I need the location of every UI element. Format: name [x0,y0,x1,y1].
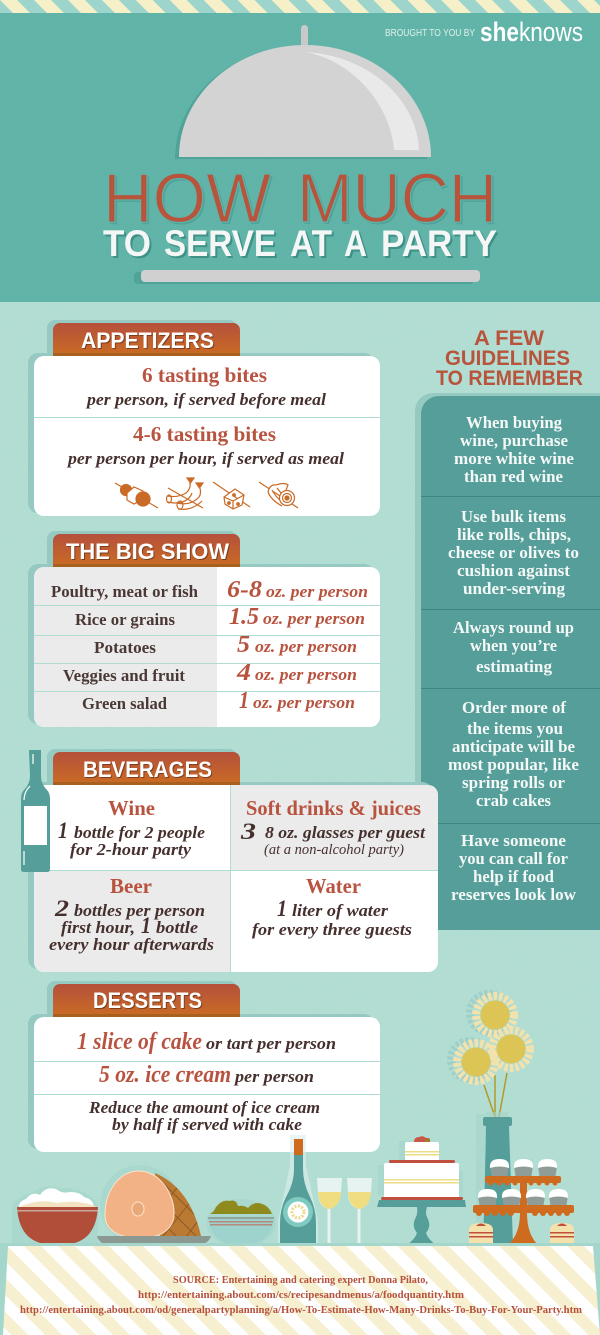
title line: to serve at a party: A [344,223,367,264]
row: green salad [82,688,355,714]
heading: the big show: THE BIG SHOW [66,539,229,564]
panel: beverages [21,749,438,972]
row: potatoes: Potatoes [94,638,157,657]
tip: popular items: most popular, like [448,755,579,774]
cell: water: 1 [277,896,287,921]
title line: how much: HOW [105,161,273,239]
heading: guidelines: A FEW [474,327,544,350]
cell: beer: 2 [54,896,69,921]
title line: how much: MUCH [299,161,499,239]
text: reduce ice cream [88,1098,320,1134]
cell: soft drinks: 8 oz. glasses per guest [265,823,425,842]
cupcakes: top tier [490,1159,557,1176]
text: ice cream [99,1062,314,1088]
tip: call for help: help if food [473,867,555,886]
cell: water: liter of water [292,901,389,920]
tip: call for help: reserves look low [451,885,577,904]
top stripe band [0,0,600,13]
text: cake [77,1029,336,1055]
icon: glazed ham on plate [97,1165,211,1246]
icon: champagne bottle [278,1135,318,1245]
heading: beverages: BEVERAGES [83,757,212,782]
tip: bulk items: under-serving [463,579,565,598]
row: rice: oz. per person [263,609,365,628]
tip: white wine: than red wine [464,467,563,486]
text: reduce ice cream: Reduce the amount of ice cream [88,1098,320,1117]
icon: wine bottle [21,750,50,872]
header panel [0,13,600,302]
title line: how much [103,159,499,239]
cell: wine [58,796,205,859]
row: potatoes [94,632,357,658]
text: 6 tasting bites: 6 tasting bites [142,363,267,387]
cell: soft drinks [240,796,425,858]
text: before meal: per person, if served before meal [85,390,326,409]
flower: right [492,1030,530,1068]
row: veggies: oz. per person [255,665,357,684]
icon: bowl of greens [206,1199,276,1247]
title line: how much: HOW [103,159,271,237]
icon: cupcake stand [473,1159,574,1245]
cell: wine: bottle for 2 people [74,823,205,842]
cell: beer: bottle [156,918,198,937]
row: poultry: oz. per person [266,582,368,601]
title [103,159,499,266]
row: rice [75,604,365,630]
source credits [20,1274,582,1316]
tip: popular items: anticipate will be [452,737,575,756]
title line: to serve at a party: SERVE [164,223,276,264]
title line: to serve at a party: TO [105,225,153,266]
tip: round up: estimating [476,657,553,676]
source credits: http://entertaining.about.com/cs/recipesandmenus/a/foodquantity.htm [138,1289,464,1301]
row: green salad: oz. per person [253,693,355,712]
cell: beer: Beer [110,874,152,898]
tip: round up: when you’re [470,636,557,655]
icon: bowl of rice [12,1186,98,1246]
icon: shrimp skewer [166,478,203,509]
text: ice cream: 5 oz. ice cream [99,1062,231,1088]
heading: guidelines [436,327,583,390]
tip: white wine [454,413,574,486]
title line: to serve at a party: AT [290,223,332,264]
icon: spring roll skewer [259,482,298,508]
tip: call for help [451,831,577,904]
text: ice cream: per person [233,1067,314,1086]
cell: wine: for 2-hour party [70,840,192,859]
tip: call for help: Have someone [461,831,566,850]
text: cake: 1 slice of cake [77,1029,202,1055]
text: 4-6 tasting bites: 4-6 tasting bites [133,422,276,446]
flower: top [470,994,514,1034]
title line: to serve at a party: PARTY [381,223,497,264]
tip: bulk items: like rolls, chips, [457,525,571,544]
tip: popular items: crab cakes [476,791,551,810]
row: rice: Rice or grains [75,610,176,629]
panel: guidelines [415,327,600,930]
cell: wine: 1 [58,818,68,843]
icon: vase of flowers [451,994,530,1245]
tip: round up [453,618,574,676]
cell: beer: every hour afterwards [49,935,214,954]
source credits: SOURCE: Entertaining and catering expert Donna Pilato, [173,1274,428,1286]
panel: the big show [28,531,380,727]
row: poultry: 6-8 [227,577,262,603]
row: veggies: Veggies and fruit [63,666,186,685]
icon: tiered cake on stand [377,1136,466,1245]
tip: bulk items: Use bulk items [461,507,566,526]
cell: soft drinks: Soft drinks & juices [246,796,421,820]
tip: bulk items: cheese or olives to [448,543,579,562]
cell: soft drinks: (at a non-alcohol party) [264,842,404,858]
tip: popular items [448,698,579,810]
footer tablecloth [0,1243,600,1335]
row: veggies: 4 [236,660,251,686]
tip: bulk items: cushion against [457,561,570,580]
text: cake: or tart per person [206,1034,336,1053]
tip: popular items: Order more of [462,698,566,717]
title line: to serve at a party: A [346,225,369,266]
title line: to serve at a party [103,223,499,266]
tip: call for help: you can call for [459,849,568,868]
sheknows logo: sheknows [480,17,583,47]
title line: to serve at a party: SERVE [166,225,278,266]
icon: serving cloche [175,25,431,159]
heading: guidelines: TO REMEMBER [436,367,583,390]
tip: popular items: the items you [467,719,563,738]
cell: beer: bottles per person [74,901,205,920]
cell: beer: 1 [141,913,151,938]
cupcakes: bottom tier [478,1189,568,1205]
heading: appetizers: APPETIZERS [81,328,214,353]
panel: appetizers [28,320,380,516]
row: poultry [51,577,368,603]
cell: soft drinks: 3 [240,819,256,844]
cell: water [252,874,412,939]
heading: guidelines: GUIDELINES [445,347,570,370]
tip: white wine: When buying [466,413,562,432]
row: veggies [63,660,357,686]
text: reduce ice cream: by half if served with cake [112,1115,302,1134]
tip: white wine: more white wine [454,449,574,468]
row: rice: 1.5 [229,604,259,630]
flower: left [451,1041,495,1081]
icon: champagne glasses [317,1178,372,1245]
tip: popular items: spring rolls or [462,773,565,792]
row: green salad: Green salad [82,694,167,713]
cell: water: for every three guests [252,920,412,939]
icon: skewer with meat and cheese [115,483,158,508]
cell: beer: first hour, [61,918,135,937]
title line: how much: MUCH [297,159,497,237]
icon: serving tray [134,270,480,284]
sponsor credit [385,17,583,47]
row: potatoes: 5 [237,632,250,658]
heading: desserts: DESSERTS [93,988,202,1013]
text: as meal: per person per hour, if served as meal [66,449,344,468]
tip: white wine: wine, purchase [460,431,568,450]
row: green salad: 1 [239,688,249,714]
panel: desserts [28,981,380,1152]
row: poultry: Poultry, meat or fish [51,582,198,601]
tip: round up: Always round up [453,618,574,637]
sponsor credit: BROUGHT TO YOU BY [385,28,475,39]
cell: beer [49,874,214,954]
title line: to serve at a party: PARTY [383,225,499,266]
cell: water: Water [306,874,361,898]
cell: wine: Wine [108,796,155,820]
icon: cheese cube skewer [213,482,250,509]
title line: to serve at a party: AT [292,225,334,266]
title line: to serve at a party: TO [103,223,151,264]
row: potatoes: oz. per person [255,637,357,656]
source credits: http://entertaining.about.com/od/generalpartyplanning/a/How-To-Estimate-How-Many-Drinks-To-Buy-For-Your-Party.htm [20,1304,582,1316]
tip: bulk items [448,507,579,598]
flower stems [484,1073,507,1117]
icon: small cakes [466,1223,578,1246]
